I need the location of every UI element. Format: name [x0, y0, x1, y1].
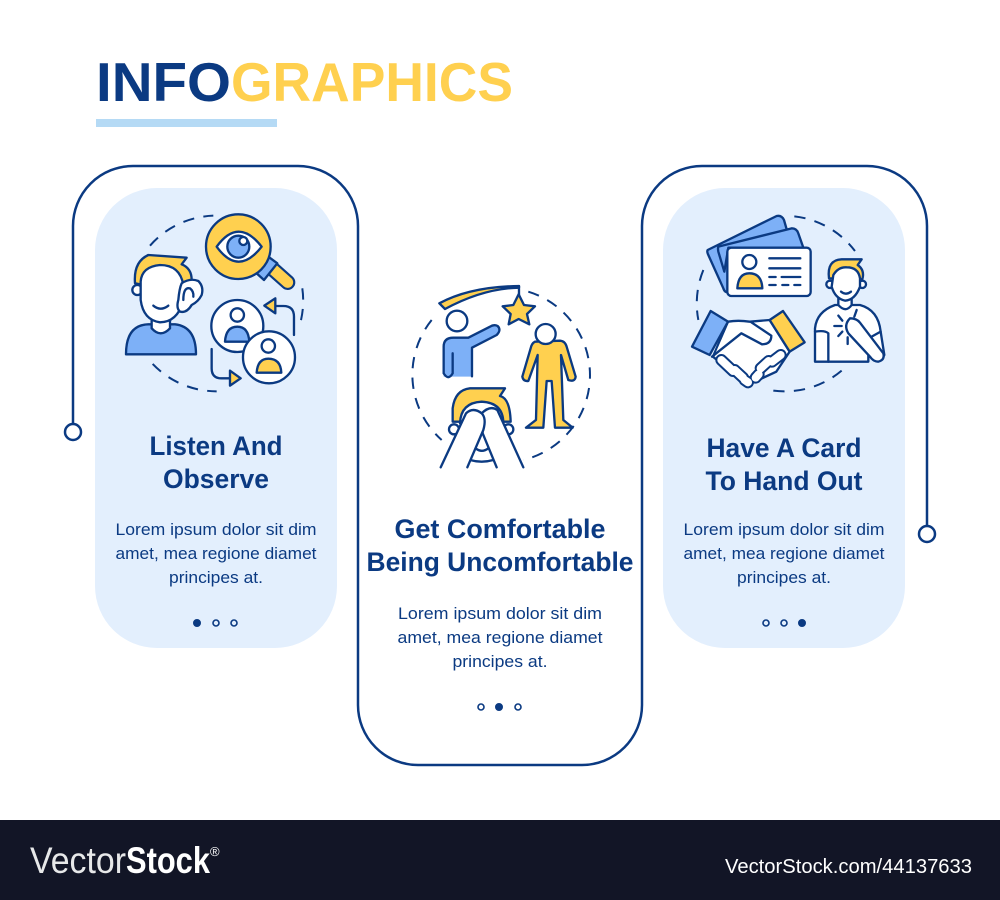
icon: comfortable [412, 286, 590, 467]
text: center body: Lorem ipsum dolor sit dim [398, 604, 602, 623]
footer logo [30, 840, 220, 881]
text: center body [398, 604, 603, 671]
icon: listen and observe [126, 214, 303, 391]
title: GRAPHICS [231, 51, 513, 113]
text: left body: amet, mea regione diamet [116, 544, 317, 563]
footer logo: ® [210, 844, 220, 859]
text: center body: principes at. [452, 652, 548, 671]
heading: have a card [706, 433, 862, 496]
footer logo: Stock [126, 840, 210, 881]
panel: left background [95, 188, 337, 648]
text: right body: amet, mea regione diamet [684, 544, 885, 563]
text: right body [684, 520, 885, 587]
pagination dots left [194, 620, 237, 626]
text: right body: principes at. [737, 568, 831, 587]
heading: have a card: To Hand Out [706, 466, 862, 496]
heading: listen and observe: Listen And [150, 431, 282, 461]
heading: get comfortable [366, 514, 634, 577]
text: right body: Lorem ipsum dolor sit dim [684, 520, 884, 539]
heading: listen and observe: Observe [163, 464, 269, 494]
panel: right background [663, 188, 905, 648]
footer logo: Vector [30, 840, 126, 881]
title: INFO [96, 51, 231, 113]
heading: get comfortable: Get Comfortable [394, 514, 606, 544]
heading: have a card: Have A Card [706, 433, 862, 463]
heading: listen and observe [150, 431, 282, 494]
text: left body: principes at. [169, 568, 263, 587]
connecting outline [65, 166, 935, 765]
text: left body: Lorem ipsum dolor sit dim [116, 520, 316, 539]
title underline [96, 119, 277, 127]
title [96, 51, 513, 113]
pagination dots center [478, 704, 521, 710]
text: left body [116, 520, 317, 587]
pagination dots right [763, 620, 805, 626]
icon: card and handshake [692, 216, 884, 391]
footer bar [0, 820, 1000, 900]
footer url: VectorStock.com/44137633 [725, 856, 972, 878]
heading: get comfortable: Being Uncomfortable [366, 547, 634, 577]
text: center body: amet, mea regione diamet [398, 628, 603, 647]
